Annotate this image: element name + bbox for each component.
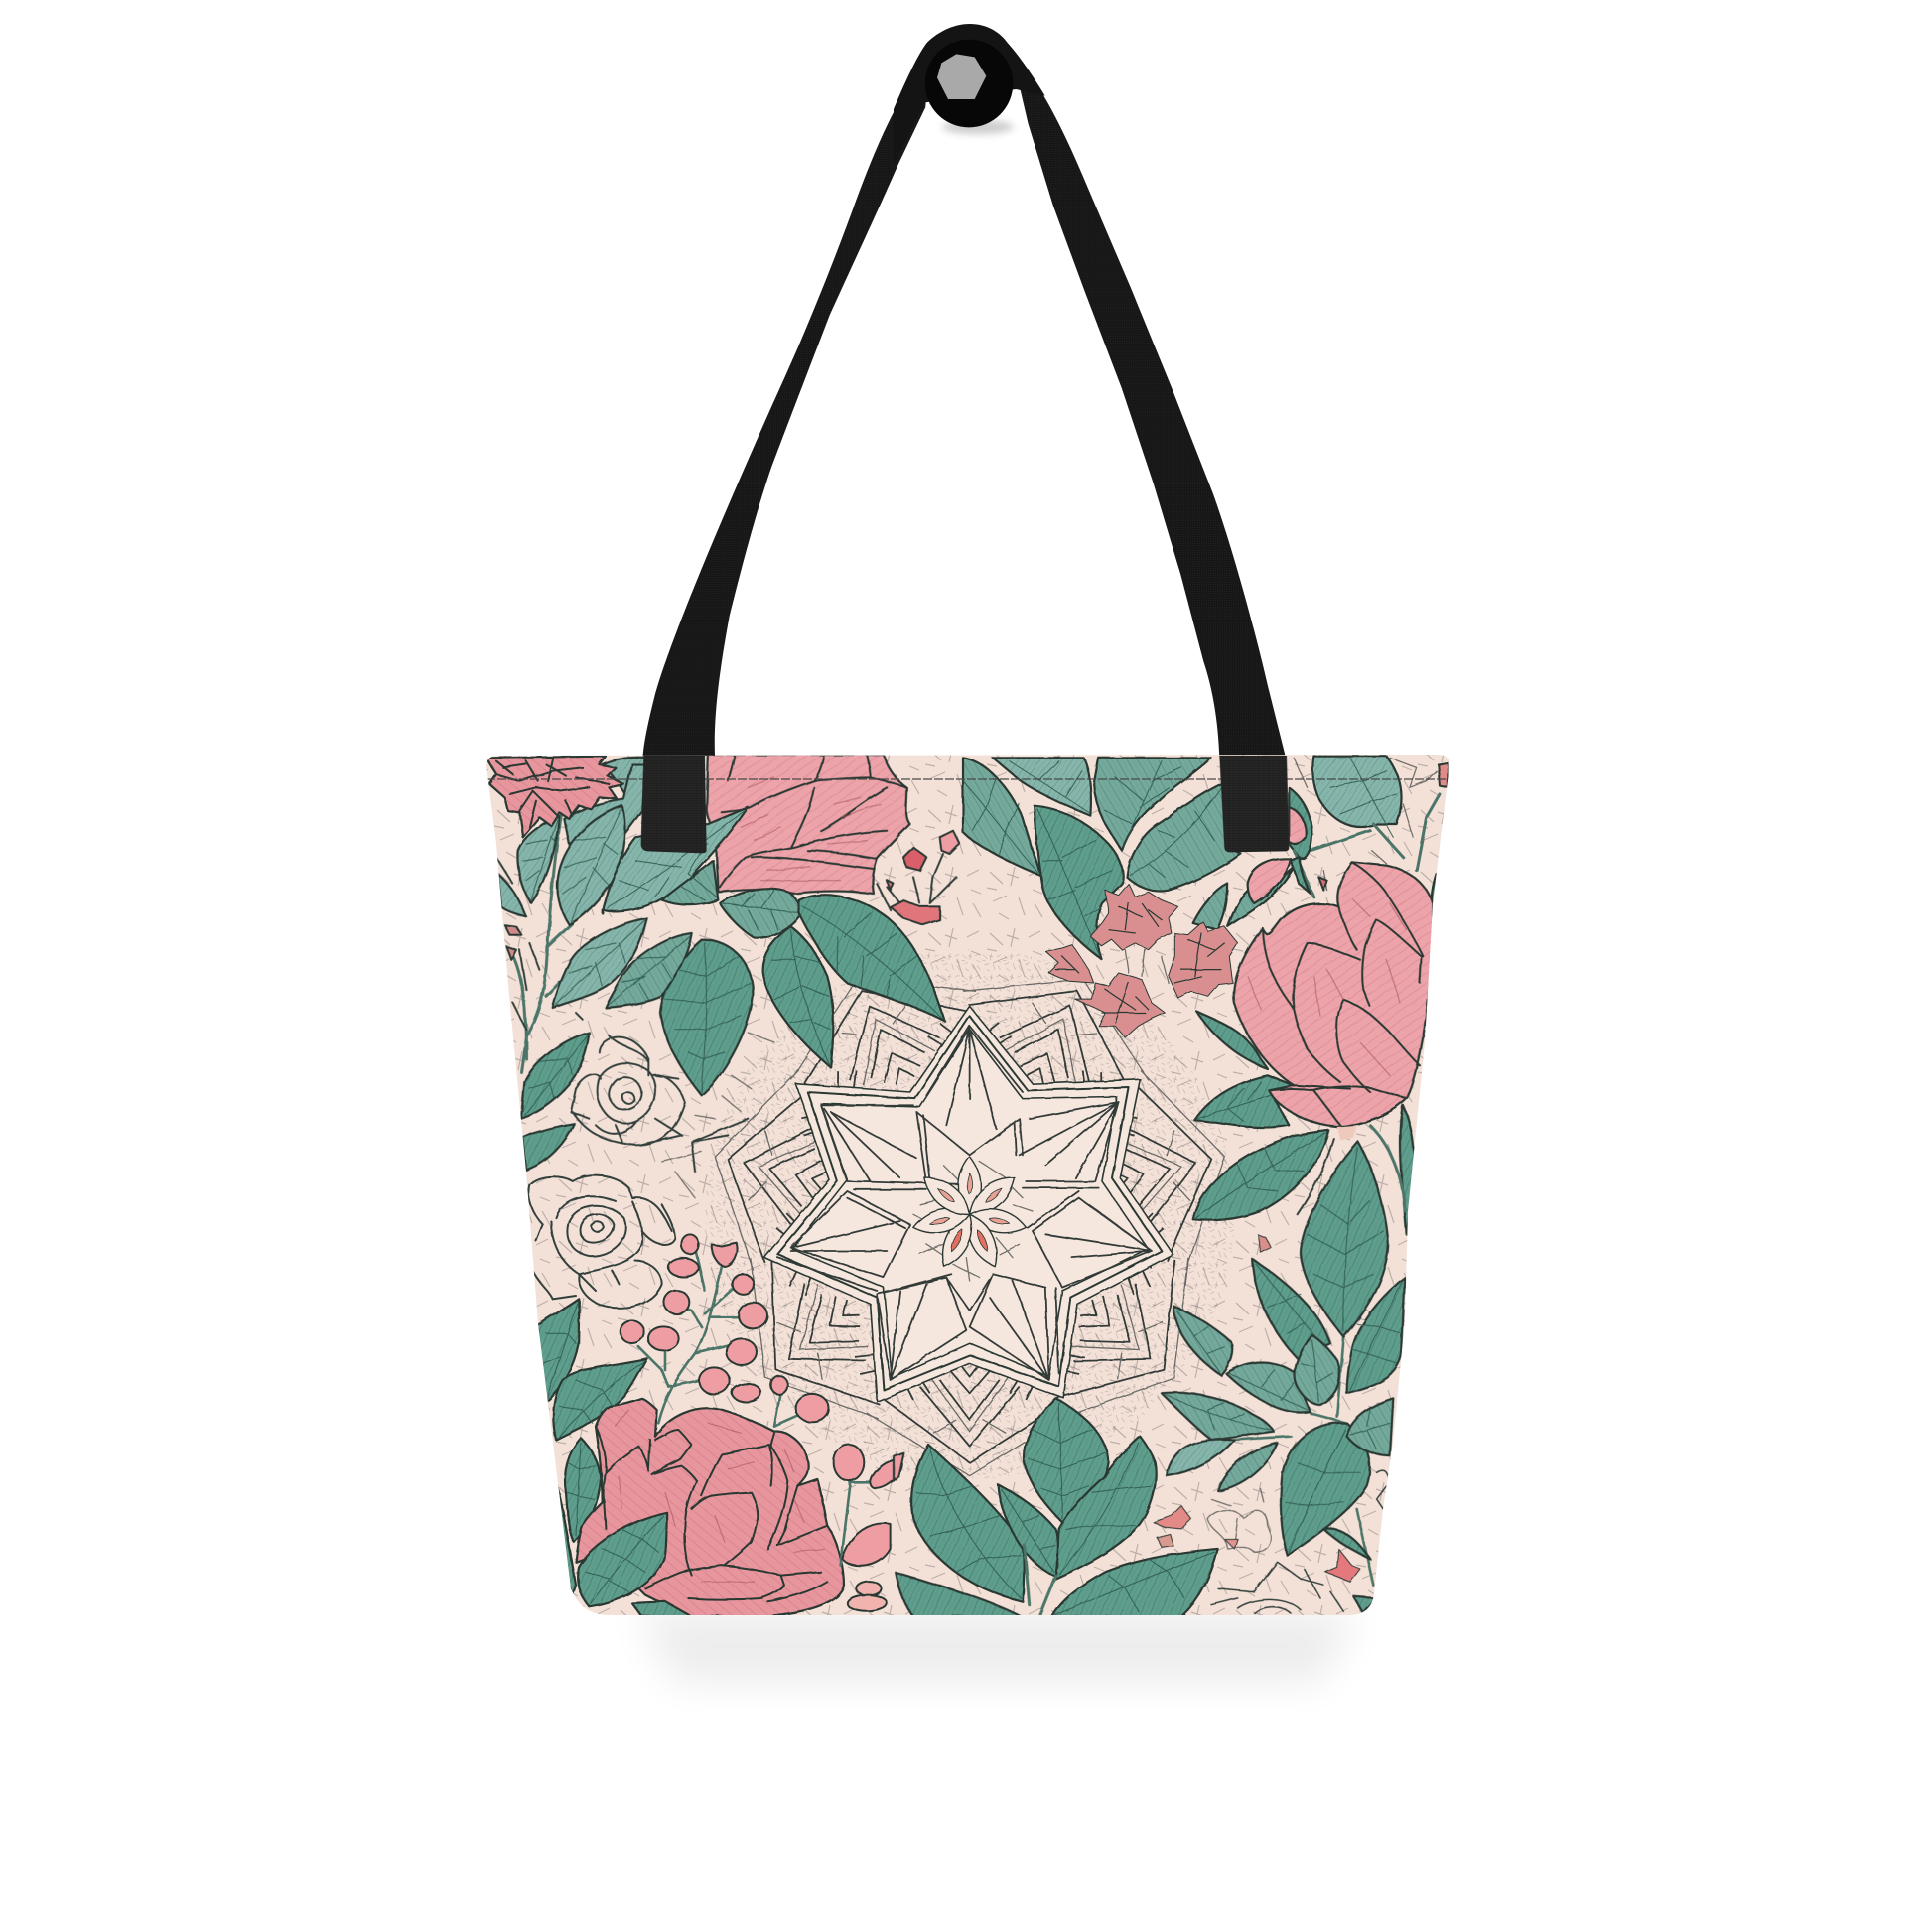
upper part of outline rose two	[528, 1175, 672, 1241]
top-left foliage and flowers	[486, 755, 960, 1241]
top-right foliage and flowers	[963, 757, 1448, 1234]
teal leaf crossing the peony	[603, 807, 748, 913]
partial bud at left	[894, 1452, 903, 1481]
centre leaf cluster	[896, 1398, 1218, 1616]
buds and green sheaths	[1193, 787, 1313, 930]
pink peony bottom	[576, 1398, 844, 1616]
sprig top right	[1294, 758, 1448, 891]
center seven petal flower	[910, 1157, 1029, 1272]
tote bag body	[477, 745, 1459, 1628]
small flowers and rose outline	[1154, 1234, 1388, 1613]
star body	[764, 1006, 1173, 1402]
mandala star	[692, 934, 1247, 1479]
lower-left leaves	[521, 1033, 589, 1170]
dahlia flower	[486, 757, 623, 837]
centre scribbles	[913, 1162, 1033, 1281]
bottom-right foliage	[894, 1142, 1405, 1616]
left strap	[643, 55, 930, 757]
left front strap tab	[641, 756, 707, 853]
right strap	[1012, 55, 1286, 757]
fabric background	[477, 745, 1459, 1628]
leaves under peony	[553, 889, 945, 1095]
small sprig at left edge	[496, 857, 583, 1030]
peg with hexagonal screw	[925, 40, 1013, 127]
pink cluster flowers	[1045, 884, 1238, 1037]
scribble halo	[705, 950, 1234, 1479]
bottom-left flowers	[533, 1201, 906, 1616]
green leaves left	[538, 1299, 647, 1595]
bag shadow on wall	[635, 1610, 1360, 1683]
pink peony top	[707, 755, 910, 894]
top stitching seam	[486, 778, 1449, 780]
tote bag product scene	[486, 24, 1449, 1684]
pink bud sprig	[621, 1234, 906, 1611]
strap loop over peg	[894, 24, 1045, 164]
background scribble texture	[477, 745, 1459, 1628]
outline rose two	[533, 1201, 675, 1308]
star kites	[777, 1026, 1152, 1380]
right front strap tab	[1219, 756, 1289, 852]
upper leaves behind strap	[498, 758, 648, 925]
red sprig	[877, 831, 960, 925]
right branch leaves	[1162, 1142, 1405, 1613]
outline rose one	[571, 1033, 774, 1198]
upper leaves	[963, 757, 1437, 960]
peg shadow	[942, 120, 1014, 134]
floral artwork	[486, 755, 1448, 1616]
outer chevrons	[692, 934, 1247, 1476]
large pink tulip flower	[1193, 862, 1433, 1234]
stems	[509, 804, 573, 1072]
